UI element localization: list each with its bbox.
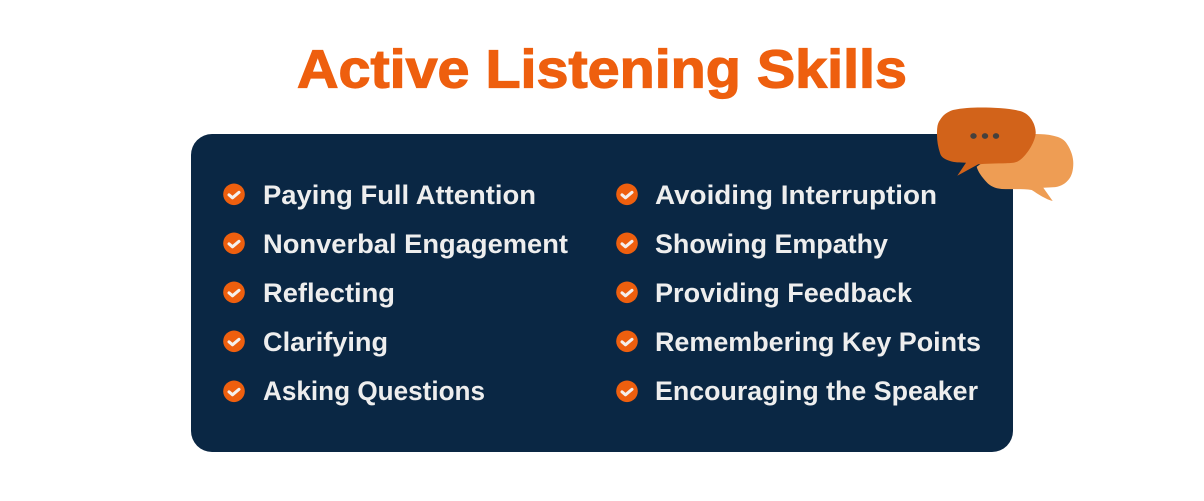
list item: Encouraging the Speaker: Encouraging the Speaker <box>655 376 978 406</box>
list item: Clarifying: Clarifying <box>263 327 388 357</box>
icon: light orange bubble <box>977 134 1073 201</box>
list item: Asking Questions: Asking Questions <box>263 376 485 406</box>
list item: Nonverbal Engagement: Nonverbal Engagement <box>263 229 568 259</box>
title: Active Listening Skills <box>297 40 907 100</box>
list item: Reflecting: Reflecting <box>263 278 395 308</box>
list item: Avoiding Interruption: Avoiding Interruption <box>655 180 937 210</box>
icon: dark orange bubble <box>937 108 1036 176</box>
list item: Providing Feedback: Providing Feedback <box>655 278 912 308</box>
list item: Showing Empathy: Showing Empathy <box>655 229 888 259</box>
icon: speech bubbles <box>937 108 1073 201</box>
list item: Paying Full Attention: Paying Full Attention <box>263 180 536 210</box>
icon: three dots <box>970 133 999 139</box>
list item: Remembering Key Points: Remembering Key Points <box>655 327 981 357</box>
panel: skills list <box>191 134 1013 452</box>
